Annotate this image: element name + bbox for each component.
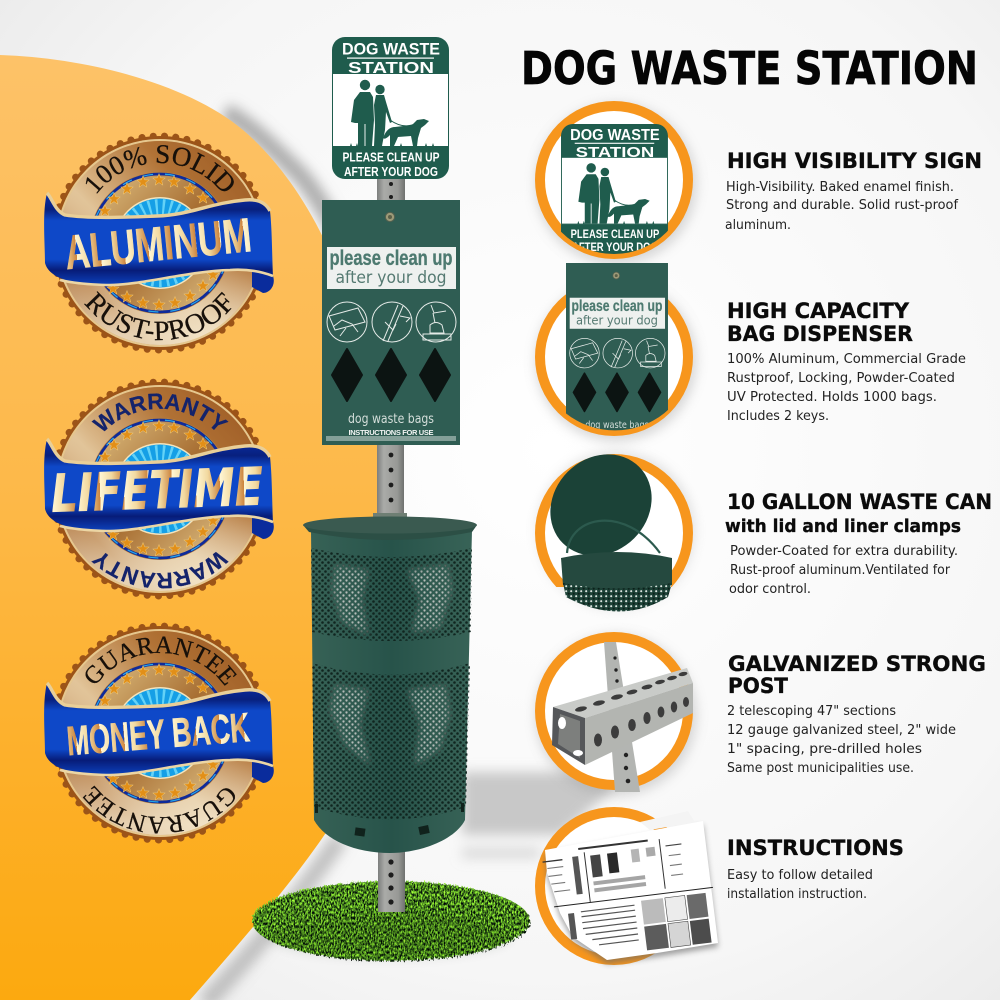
can lid xyxy=(303,516,477,540)
badge top text: GUARANTEE xyxy=(85,636,237,686)
heading: INSTRUCTIONS xyxy=(727,836,904,861)
feature: high visibility sign xyxy=(725,149,982,233)
floor shadow of the can xyxy=(462,772,612,858)
heading: with lid and liner clamps xyxy=(725,516,961,537)
heading: HIGH VISIBILITY SIGN xyxy=(727,149,982,174)
sign message: PLEASE CLEAN UP xyxy=(342,150,440,164)
description: odor control. xyxy=(729,581,811,597)
circle: bag dispenser xyxy=(535,263,696,444)
mini sign message: PLEASE CLEAN UP xyxy=(571,227,659,241)
mini dispenser light label: after your dog xyxy=(576,313,658,327)
heading: POST xyxy=(728,674,788,699)
heading: HIGH CAPACITY xyxy=(727,299,909,324)
badge top text: 100% SOLID xyxy=(86,145,234,194)
circle: galvanized post xyxy=(535,632,696,795)
grass base xyxy=(252,881,530,961)
instruction sheet xyxy=(541,811,720,964)
bag dispenser xyxy=(322,200,460,445)
description: Rustproof, Locking, Powder-Coated xyxy=(727,370,955,386)
mini dispenser bottom label: dog waste bags xyxy=(585,420,649,431)
description xyxy=(727,703,956,776)
sign heading: DOG WASTE xyxy=(342,40,440,58)
circle: high visibility sign xyxy=(535,101,696,266)
description xyxy=(729,543,958,597)
badge bottom text: GUARANTEE xyxy=(82,786,236,834)
dispenser bold label: please clean up xyxy=(330,247,452,270)
post xyxy=(373,176,407,912)
description: High-Visibility. Baked enamel finish. xyxy=(726,179,954,195)
description: Easy to follow detailed xyxy=(727,867,873,883)
station sign xyxy=(332,37,449,179)
dispenser light label: after your dog xyxy=(336,268,446,287)
description: Same post municipalities use. xyxy=(727,760,914,776)
heading: GALVANIZED STRONG xyxy=(728,652,986,677)
badge: 100% solid aluminum xyxy=(44,132,274,354)
dispenser instructions label: INSTRUCTIONS FOR USE xyxy=(348,428,434,437)
description: Includes 2 keys. xyxy=(727,408,829,424)
circle: instructions xyxy=(535,807,720,965)
badge top text: WARRANTY xyxy=(92,393,228,432)
heading xyxy=(725,490,992,537)
description: 2 telescoping 47" sections xyxy=(727,703,896,719)
heading: BAG DISPENSER xyxy=(727,322,913,347)
description xyxy=(727,351,966,424)
feature: 10 gallon waste can xyxy=(725,490,992,597)
badge ribbon text: LIFETIME xyxy=(50,457,264,525)
mini sign heading: DOG WASTE xyxy=(570,127,660,144)
description: 1" spacing, pre-drilled holes xyxy=(727,741,922,757)
badge: lifetime warranty xyxy=(44,378,274,600)
description: UV Protected. Holds 1000 bags. xyxy=(727,389,937,405)
orange background shape xyxy=(0,55,395,1000)
feature: instructions xyxy=(727,836,904,902)
description: installation instruction. xyxy=(727,886,867,902)
badge bottom text: WARRANTY xyxy=(91,552,229,588)
description: aluminum. xyxy=(725,217,791,233)
mini dispenser instructions label: INSTRUCTIONS FOR USE xyxy=(586,433,649,439)
feature: galvanized strong post xyxy=(727,652,986,776)
heading xyxy=(727,299,913,347)
badge ribbon text: ALUMINUM xyxy=(63,209,254,280)
badge: money back guarantee xyxy=(44,622,274,844)
mini dispenser bold label: please clean up xyxy=(572,298,662,315)
description: Rust-proof aluminum.Ventilated for xyxy=(730,562,950,578)
description: Powder-Coated for extra durability. xyxy=(730,543,958,559)
description xyxy=(725,179,959,233)
feature: high capacity bag dispenser xyxy=(727,299,966,424)
circle: waste can xyxy=(530,434,694,612)
mini sign message line 2: AFTER YOUR DOG xyxy=(572,240,658,254)
mini sign subheading: STATION xyxy=(576,145,654,161)
sign subheading: STATION xyxy=(348,60,434,77)
description xyxy=(727,867,873,902)
description: 12 gauge galvanized steel, 2" wide xyxy=(727,722,956,738)
sign message line 2: AFTER YOUR DOG xyxy=(344,164,438,179)
badge ribbon text: MONEY BACK xyxy=(65,704,251,764)
badge bottom text: RUST-PROOF xyxy=(84,291,232,340)
heading xyxy=(728,652,986,699)
dispenser bottom label: dog waste bags xyxy=(348,412,434,427)
waste can xyxy=(303,516,477,853)
orange edge shadow xyxy=(205,112,376,1000)
description: 100% Aluminum, Commercial Grade xyxy=(727,351,966,367)
description: Strong and durable. Solid rust-proof xyxy=(726,197,959,213)
